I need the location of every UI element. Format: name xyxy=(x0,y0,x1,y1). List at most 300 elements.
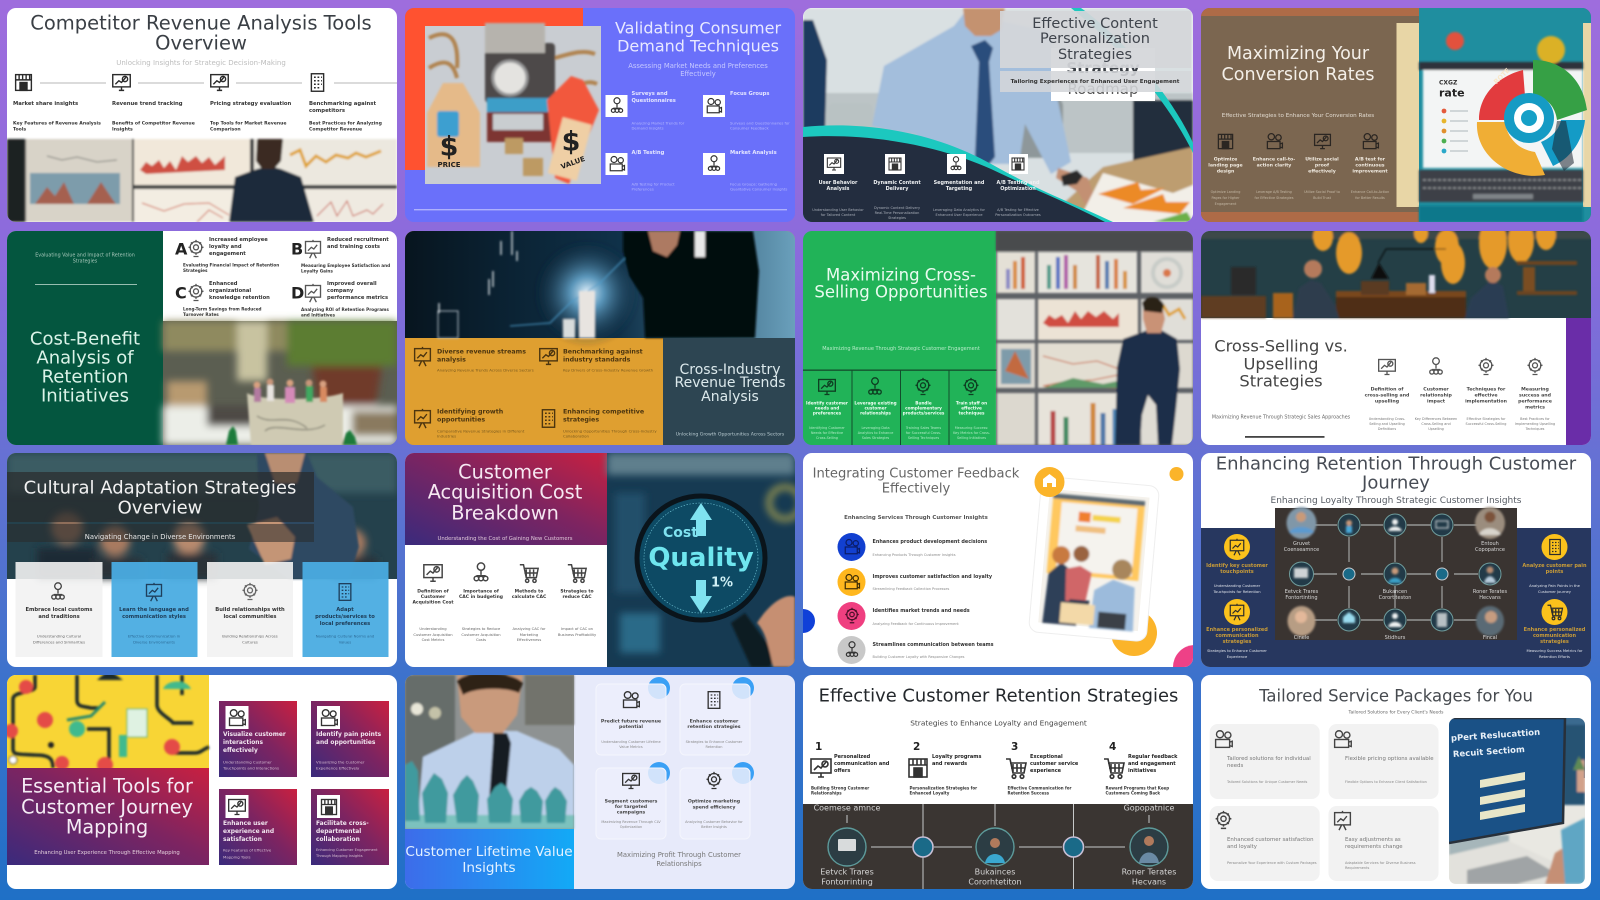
subtitle: Enhancing Loyalty Through Strategic Customer Insights xyxy=(1270,496,1521,506)
title xyxy=(428,460,583,524)
strategy 1: 1 xyxy=(814,741,822,753)
title xyxy=(405,844,573,876)
item descriptions: Impact of CAC on xyxy=(561,627,594,631)
item labels: Leverage existing xyxy=(854,400,896,406)
strategy 4: and engagement xyxy=(1128,761,1176,767)
shape: navy wave with teal edge xyxy=(802,125,1112,222)
photo sign text: Roadmap xyxy=(1067,80,1138,98)
item B xyxy=(291,237,390,274)
item: product development: Enhancing Products Through Customer Insights xyxy=(872,553,955,557)
item labels xyxy=(1208,156,1388,174)
diagram: customer journey network: Entouh xyxy=(1481,541,1498,547)
subtitle: Unlocking Growth Opportunities Across Sectors xyxy=(676,432,785,438)
title: Competitor Revenue Analysis Tools xyxy=(30,12,372,34)
item descriptions: Dynamic Content Delivery xyxy=(873,206,920,210)
card: marketing spend: spend efficiency xyxy=(693,804,735,810)
item: surveys: Questionnaires xyxy=(632,98,676,104)
item descriptions: Costs xyxy=(476,638,486,642)
icons row xyxy=(1378,358,1542,374)
strategy 1: communication and xyxy=(834,761,889,767)
title: Enhancing Retention Through Customer xyxy=(1215,454,1576,474)
item descriptions: Marketing xyxy=(520,633,538,637)
card: retention strategies xyxy=(680,677,754,755)
icons row xyxy=(1218,134,1378,149)
title: Initiatives xyxy=(41,386,129,406)
item labels: Acquisition Cost xyxy=(412,600,454,606)
card: revenue potential: Predict future revenue xyxy=(601,718,661,724)
title: Integrating Customer Feedback xyxy=(812,466,1019,482)
subtitle: Maximizing Revenue Through Strategic Customer Engagement xyxy=(822,346,979,352)
navy lower band xyxy=(1200,528,1590,667)
diagram: customer journey network: Roner Terates xyxy=(1472,589,1507,595)
icons row xyxy=(818,378,978,394)
item descriptions: Utilize Social Proof to xyxy=(1304,190,1339,194)
title xyxy=(1214,336,1347,390)
item B: Reduced recruitment xyxy=(327,237,389,243)
card: individual needs: needs xyxy=(1226,763,1243,769)
item: growth opportunities: opportunities xyxy=(437,416,485,424)
item descriptions: Customer Acquisition xyxy=(461,633,501,637)
card: enhance experience: Enhance user xyxy=(223,821,268,827)
item descriptions: Enhance Call-to-Action xyxy=(1350,190,1389,194)
item descriptions: Leveraging Data Analytics for xyxy=(933,208,985,212)
item: market analysis xyxy=(703,150,787,192)
diagram: retention network photo: Roner Terates xyxy=(1121,868,1176,876)
diagram: customer journey network: Stidhurs xyxy=(1384,635,1405,641)
item: growth opportunities: Comparative Revenue Strategies in Different xyxy=(437,428,525,434)
item: market analysis: Focus Groups: Gathering xyxy=(730,182,778,186)
photo: conversion rate dashboard: rate xyxy=(1438,86,1464,100)
title: Journey xyxy=(1361,472,1430,494)
item C: Turnover Rates xyxy=(183,312,219,317)
title xyxy=(21,774,193,838)
item A: Strategies xyxy=(183,268,208,273)
item labels xyxy=(1364,386,1551,410)
item A xyxy=(175,237,279,273)
title: Analysis xyxy=(701,389,759,405)
strategy 1: Building Strong Customer xyxy=(810,786,869,790)
item: pain points xyxy=(1522,534,1587,594)
card: satisfaction: Enhanced customer satisfaction xyxy=(1226,837,1313,843)
item descriptions: Definitions xyxy=(1377,427,1396,431)
item descriptions: for Effective Strategies xyxy=(1254,196,1293,200)
card: enhance experience: experience and xyxy=(223,829,274,835)
item: focus groups: Consumer Feedback xyxy=(730,126,769,130)
caption: Maximizing Profit Through Customer xyxy=(617,851,741,859)
item descriptions: Techniques xyxy=(1524,427,1544,431)
card: revenue potential: potential xyxy=(619,724,643,730)
card: flexible pricing: Flexible pricing options available xyxy=(1344,756,1434,762)
card: pain points: Visualizing the Customer xyxy=(316,760,365,764)
item descriptions xyxy=(812,206,1040,220)
item labels: Utilize social xyxy=(1305,156,1339,162)
item: communication strategies left: communication xyxy=(1215,633,1258,639)
item: market analysis: Market Analysis xyxy=(730,150,777,156)
item: surveys: Analyzing Market Trends for xyxy=(632,120,685,126)
strategy 1: Relationships xyxy=(810,790,842,796)
item descriptions: Needs for Effective xyxy=(810,431,843,435)
card: retention strategies: Enhance customer xyxy=(690,718,739,724)
item B: Measuring Employee Satisfaction and xyxy=(301,263,390,268)
icon boxes xyxy=(824,154,1028,174)
title: Cross-Industry xyxy=(679,362,781,378)
item labels: Segmentation and xyxy=(933,180,984,186)
item descriptions: Enhanced User Experience xyxy=(935,213,982,217)
card: flexible pricing xyxy=(1328,724,1438,799)
item: AB testing: Preferences xyxy=(632,186,654,192)
title: Effective Customer Retention Strategies xyxy=(818,686,1178,706)
item labels xyxy=(818,180,1039,192)
item labels: performance xyxy=(1518,398,1551,404)
photo: price and value tags: $ xyxy=(440,132,458,162)
item B: and training costs xyxy=(327,244,380,250)
item B: Loyalty Gains xyxy=(301,268,333,274)
card: collaboration: collaboration xyxy=(316,837,360,843)
item: AB testing xyxy=(606,150,675,192)
diagram: retention network photo: Bukainces xyxy=(974,868,1015,876)
table dividers xyxy=(802,370,996,445)
item C xyxy=(175,281,270,317)
card: collaboration: Enhancing Customer Engagement xyxy=(316,848,378,852)
item: touchpoints: Identify key customer xyxy=(1206,563,1268,569)
item descriptions: Strategies to Reduce xyxy=(462,627,501,631)
diagram: retention network photo: Hecvans xyxy=(1131,878,1166,886)
photo: price and value tags: VALUE xyxy=(560,155,586,171)
item descriptions: Identifying Customer xyxy=(809,426,845,430)
item: satisfaction: Improves customer satisfaction and loyalty xyxy=(872,574,992,580)
strategy 2: and rewards xyxy=(932,761,967,767)
title: Maximizing Cross- xyxy=(826,266,976,284)
item: pain points: Analyze customer pain xyxy=(1522,563,1587,569)
panel: Cross-Industry Revenue Trends Analysis xyxy=(405,231,795,445)
item descriptions: Strategies xyxy=(888,216,906,220)
card: revenue potential: Understanding Customer Lifetime xyxy=(601,740,661,744)
card: collaboration: Facilitate cross- xyxy=(316,821,369,827)
sidebar subtitle xyxy=(35,252,135,264)
item labels: improvement xyxy=(1352,168,1388,174)
panel: Validating Consumer Demand Techniques xyxy=(405,8,795,222)
item labels: Train staff on xyxy=(955,400,987,406)
item labels: upselling xyxy=(1374,398,1399,404)
item: satisfaction xyxy=(837,568,992,596)
item labels: techniques xyxy=(958,410,985,416)
sidebar rule xyxy=(35,283,137,286)
subtitle: Enhancing User Experience Through Effective Mapping xyxy=(34,850,180,856)
panel: Integrating Customer Feedback Effectively xyxy=(802,453,1192,667)
item descriptions: Selling Initiatives xyxy=(956,436,986,440)
photo: recruit section on monitor: Recuit Sectiom xyxy=(1452,745,1525,760)
item labels: calculate CAC xyxy=(512,594,547,600)
photo: two men at desk with balloons xyxy=(1200,217,1590,318)
card: language: Diverse Environments xyxy=(133,640,175,644)
item: surveys: Surveys and xyxy=(632,91,668,97)
title xyxy=(812,466,1019,496)
item descriptions: A/B Testing for Effective xyxy=(997,208,1038,212)
panel: Maximizing Your Conversion Rates xyxy=(1200,8,1590,222)
photo: presenter at table xyxy=(802,8,1192,222)
item descriptions: Upselling xyxy=(1428,427,1443,431)
strategy 3: experience xyxy=(1030,768,1061,774)
item: benchmarking: Key Drivers of Cross-Industry Revenue Growth xyxy=(563,368,654,372)
item labels: Customer xyxy=(1423,386,1449,392)
diagram: customer journey network: Eetvck Trares xyxy=(1284,589,1318,595)
item descriptions: Personalization Outcomes xyxy=(995,213,1040,217)
item descriptions: Selling and Upselling xyxy=(1369,422,1404,426)
card: customs xyxy=(16,562,102,657)
title: Demand Techniques xyxy=(617,36,779,56)
panel: Maximizing Cross-Selling Opportunities xyxy=(802,231,1192,445)
subtitle: Unlocking Insights for Strategic Decision-Making xyxy=(116,59,286,67)
diagram: retention network photo: Fontorrinting xyxy=(821,878,872,886)
photo: recruit section on monitor: pPert Reslucattion xyxy=(1450,728,1540,744)
title: Revenue Trends xyxy=(674,375,786,391)
title: Strategies xyxy=(1239,372,1322,390)
item: communication strategies right xyxy=(1523,599,1585,659)
icons row xyxy=(424,563,586,582)
item descriptions: Analytics to Enhance xyxy=(857,431,893,435)
item: growth opportunities: Identifying growth xyxy=(437,408,503,416)
item descriptions: for Successful Cross- xyxy=(905,431,941,435)
item: communication strategies left: Strategies to Enhance Customer xyxy=(1207,649,1267,653)
item A: A xyxy=(175,240,188,258)
card: flexible pricing: Flexible Options to Enhance Client Satisfaction xyxy=(1344,780,1426,784)
item labels: effective xyxy=(961,406,981,410)
title: Cultural Adaptation Strategies xyxy=(24,478,296,498)
item: diverse revenue xyxy=(415,347,534,372)
card: individual needs: Tailored Solutions for Unique Customer Needs xyxy=(1226,780,1307,784)
item C: organizational xyxy=(209,288,251,294)
feature descriptions: Benefits of Competitor Revenue xyxy=(112,120,195,126)
card: customs: Embrace local customs xyxy=(25,607,93,613)
card: marketing spend xyxy=(680,762,754,839)
photo: recruit section on monitor xyxy=(1448,718,1584,884)
item descriptions: Measuring Success: xyxy=(954,426,988,430)
card: adjustments xyxy=(1328,806,1438,881)
item: communication strategies left: strategies xyxy=(1222,639,1251,645)
gradient header xyxy=(405,453,607,545)
strategy 4: initiatives xyxy=(1128,768,1156,774)
sidebar subtitle: Strategies xyxy=(73,258,98,264)
card: individual needs: Tailored solutions for individual xyxy=(1226,756,1310,762)
colour bars xyxy=(1200,8,1419,222)
title: Customer Journey xyxy=(21,796,193,818)
title: Analysis of xyxy=(36,348,134,368)
item labels: A/B Testing and xyxy=(996,180,1039,186)
item C: Enhanced xyxy=(209,281,238,287)
card: retention strategies: Strategies to Enhance Customer xyxy=(686,740,743,744)
card: collaboration xyxy=(311,789,389,865)
diagram: customer journey network: Fincal xyxy=(1482,635,1497,641)
item labels: complementary xyxy=(905,406,942,410)
title box xyxy=(1000,11,1190,92)
card: individual needs xyxy=(1209,724,1319,799)
item descriptions: Key Differences Between xyxy=(1414,417,1457,421)
card: revenue potential: Value Metrics xyxy=(619,745,643,749)
item labels: effective xyxy=(1474,392,1497,398)
item descriptions: Training Sales Teams xyxy=(904,426,941,430)
title: Mapping xyxy=(66,816,148,838)
card: marketing spend: Analyzing Customer Behavior for xyxy=(685,820,743,824)
title xyxy=(814,266,987,302)
card: enhance experience: Key Features of Effective xyxy=(223,848,272,852)
card: products: Navigating Cultural Norms and xyxy=(316,634,375,638)
title: Overview xyxy=(155,32,247,54)
subtitle: Enhancing Services Through Customer Insights xyxy=(844,515,987,521)
item descriptions: Customer Acquisition xyxy=(413,633,453,637)
item: growth opportunities: Industries xyxy=(437,434,456,438)
item A: loyalty and xyxy=(209,244,242,250)
item: focus groups xyxy=(703,91,790,130)
item descriptions: Best Practices for xyxy=(1520,417,1550,421)
item C: knowledge retention xyxy=(209,295,270,301)
card: marketing spend: Optimize marketing xyxy=(688,798,740,804)
card: language: communication styles xyxy=(122,614,186,620)
item descriptions: Understanding User Behavior xyxy=(812,208,864,212)
title: Maximizing Your xyxy=(1226,44,1369,64)
card: language: Effective Communication in xyxy=(128,634,181,638)
accent block xyxy=(405,8,583,170)
feature labels: Revenue trend tracking xyxy=(112,101,183,107)
title: Insights xyxy=(462,860,516,876)
item: benchmarking xyxy=(540,348,654,372)
item labels: needs and xyxy=(814,406,839,410)
strategy 3: customer service xyxy=(1030,761,1078,767)
card: customs: and traditions xyxy=(38,614,80,620)
title: Cross-Selling vs. xyxy=(1214,336,1347,356)
item D xyxy=(291,281,389,318)
card: marketing spend: Better Insights xyxy=(701,825,727,829)
item descriptions: Optimize Landing xyxy=(1210,190,1240,194)
title: Upselling xyxy=(1243,354,1318,374)
card: products: Values xyxy=(339,640,351,644)
card: relationships: Build relationships with xyxy=(215,607,285,613)
item labels: products/services xyxy=(902,410,944,416)
item: pain points: Customer Journey xyxy=(1537,590,1571,594)
title: Customer xyxy=(458,460,552,484)
item labels: Techniques for xyxy=(1466,386,1506,392)
title xyxy=(30,328,140,406)
item: pain points: Analyzing Pain Points in the xyxy=(1529,584,1580,588)
item: AB testing: A/B Testing for Product xyxy=(632,182,675,186)
strategy 4: Reward Programs that Keep xyxy=(1105,786,1169,790)
item: communication strategies left: Experience xyxy=(1226,655,1248,659)
diagram: customer journey network: Copopatnce xyxy=(1475,547,1504,553)
strategy 2: Personalization Strategies for xyxy=(909,786,977,790)
item: competitive strategies: Enhancing competitive xyxy=(563,408,644,416)
strategy 3 xyxy=(1006,741,1078,796)
item: market trends: Analyzing Feedback for Continuous Improvement xyxy=(872,622,959,626)
card: customs: Understanding Cultural xyxy=(37,634,81,638)
card: satisfaction xyxy=(1209,806,1319,881)
item labels: Strategies to xyxy=(560,588,594,594)
item labels: Bundle xyxy=(915,400,931,406)
title: Cost-Benefit xyxy=(30,328,140,350)
photo: blurred team with pointing executive xyxy=(7,453,397,579)
caption xyxy=(617,851,741,868)
purple stripe xyxy=(1566,318,1590,445)
item: communication: Building Customer Loyalty with Responsive Changes xyxy=(872,655,964,659)
icons row xyxy=(16,74,324,91)
panel: Essential Tools for Customer Journey Mapping xyxy=(7,675,397,889)
item labels: proof xyxy=(1314,162,1330,168)
item descriptions: for Tailored Content xyxy=(820,213,855,217)
timeline connector xyxy=(40,82,397,84)
item labels: continuous xyxy=(1355,162,1384,168)
feature descriptions: Insights xyxy=(112,126,133,132)
title xyxy=(615,18,781,56)
item: touchpoints: Touchpoints for Retention xyxy=(1212,590,1261,594)
photo: executive and light chart xyxy=(405,231,795,348)
strategy 2 xyxy=(908,741,981,796)
card: visualize: interactions xyxy=(223,740,263,746)
item: touchpoints xyxy=(1206,534,1268,594)
item labels: metrics xyxy=(1525,404,1545,410)
feature descriptions: Top Tools for Market Revenue xyxy=(210,120,287,126)
card: retention strategies: retention strategies xyxy=(687,724,741,730)
item: market analysis: Qualitative Consumer Insights xyxy=(730,186,787,192)
item labels: Delivery xyxy=(885,186,909,192)
item: surveys: Demand Insights xyxy=(632,126,664,130)
feature labels: Benchmarking against xyxy=(309,101,376,107)
card: enhance experience xyxy=(219,789,297,865)
item descriptions: Engagement xyxy=(1214,202,1236,206)
item B: B xyxy=(291,240,303,258)
strategy 1: Personalized xyxy=(834,754,870,760)
card: pain points: and opportunities xyxy=(316,740,376,746)
photo: conversion rate dashboard xyxy=(1418,8,1590,222)
panel: Effective Content Personalization Strategies xyxy=(802,8,1192,222)
item: growth opportunities xyxy=(415,408,525,438)
item: product development: Enhances product development decisions xyxy=(872,539,987,545)
title xyxy=(1032,16,1158,63)
title: Essential Tools for xyxy=(21,774,193,798)
subtitle: Tailoring Experiences for Enhanced User Engagement xyxy=(1010,79,1179,85)
item labels: A/B test for xyxy=(1354,156,1385,162)
card: collaboration: Through Mapping Insights xyxy=(315,854,363,858)
title: Strategies xyxy=(1057,47,1132,63)
strategy 3: 3 xyxy=(1010,741,1018,753)
card: products: local preferences xyxy=(320,621,370,627)
item: communication strategies right: strategies xyxy=(1540,639,1568,645)
subtitle: Tailored Solutions for Every Client's Needs xyxy=(1347,710,1444,716)
item descriptions: Pages for Higher xyxy=(1211,196,1240,200)
item labels: Targeting xyxy=(945,186,972,192)
panel: Competitor Revenue Analysis Tools Overview xyxy=(7,8,397,222)
item: diverse revenue: Analyzing Revenue Trends Across Diverse Sectors xyxy=(437,368,534,372)
item D: company xyxy=(327,288,354,294)
sidebar subtitle: Evaluating Value and Impact of Retention xyxy=(35,252,135,258)
item C: C xyxy=(175,284,187,302)
title: Selling Opportunities xyxy=(814,282,987,302)
item labels: relationship xyxy=(1420,392,1452,398)
strategy 2: 2 xyxy=(912,741,920,753)
card: targeted campaigns: campaigns xyxy=(617,810,645,816)
item: surveys xyxy=(606,91,685,130)
item labels: customer xyxy=(864,406,887,410)
item descriptions: Successful Cross-Selling xyxy=(1465,422,1506,426)
card: visualize: Understanding Customer xyxy=(223,760,272,764)
feature descriptions xyxy=(13,120,382,132)
card: adjustments: Requirements xyxy=(1344,866,1369,870)
subtitle: Assessing Market Needs and Preferences xyxy=(628,62,768,70)
item labels: Optimization xyxy=(1000,186,1036,192)
card: targeted campaigns: Segment customers xyxy=(605,798,658,804)
card: visualize: Touchpoints and Interactions xyxy=(222,766,279,770)
item descriptions xyxy=(1210,190,1389,206)
panel: Customer Acquisition Cost Breakdown xyxy=(405,453,795,667)
card: enhance experience: Mapping Tools xyxy=(223,854,251,860)
card: language xyxy=(112,562,198,657)
